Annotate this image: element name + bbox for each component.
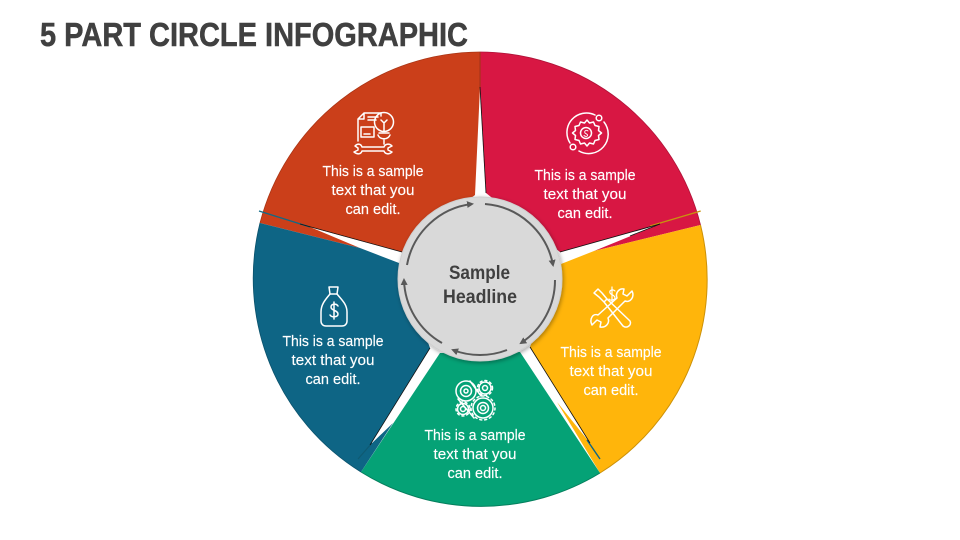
text: yellow segment: This is a sample: [560, 344, 662, 361]
center headline: Sample: [449, 263, 510, 284]
panel: red segment: [480, 52, 700, 252]
text: teal segment: can edit.: [306, 371, 360, 388]
panel: green segment: [361, 352, 600, 506]
text: green segment: This is a sample: [424, 427, 526, 444]
panel: center circle: [398, 197, 562, 361]
text: red segment: This is a sample: [534, 167, 636, 184]
text: orange segment: This is a sample: [322, 163, 424, 180]
title: 5 PART CIRCLE INFOGRAPHIC: [40, 16, 468, 53]
icon: belt-linked gears: [456, 380, 495, 420]
center headline: Headline: [443, 287, 517, 308]
wedge edge lines: [259, 52, 701, 459]
text: teal segment: text that you: [292, 352, 374, 369]
icon: blueprint, light bulb and wrench: [354, 112, 394, 154]
text: orange segment: text that you: [332, 182, 414, 199]
panel: teal segment: [253, 223, 430, 472]
panel: orange segment: [260, 52, 480, 252]
text: red segment: can edit.: [558, 205, 612, 222]
text: yellow segment: text that you: [570, 363, 652, 380]
text: yellow segment: can edit.: [584, 382, 638, 399]
text: green segment: text that you: [434, 446, 516, 463]
text: teal segment: This is a sample: [282, 333, 384, 350]
text: orange segment: can edit.: [346, 201, 400, 218]
icon: crossed wrench and screwdriver: [591, 287, 633, 327]
circular arrows: [404, 204, 555, 355]
text: red segment: text that you: [544, 186, 626, 203]
panel: yellow segment: [530, 225, 707, 473]
icon: gear with dollar sign: [567, 113, 608, 154]
icon: money bag: [321, 287, 347, 326]
text: green segment: can edit.: [448, 465, 502, 482]
